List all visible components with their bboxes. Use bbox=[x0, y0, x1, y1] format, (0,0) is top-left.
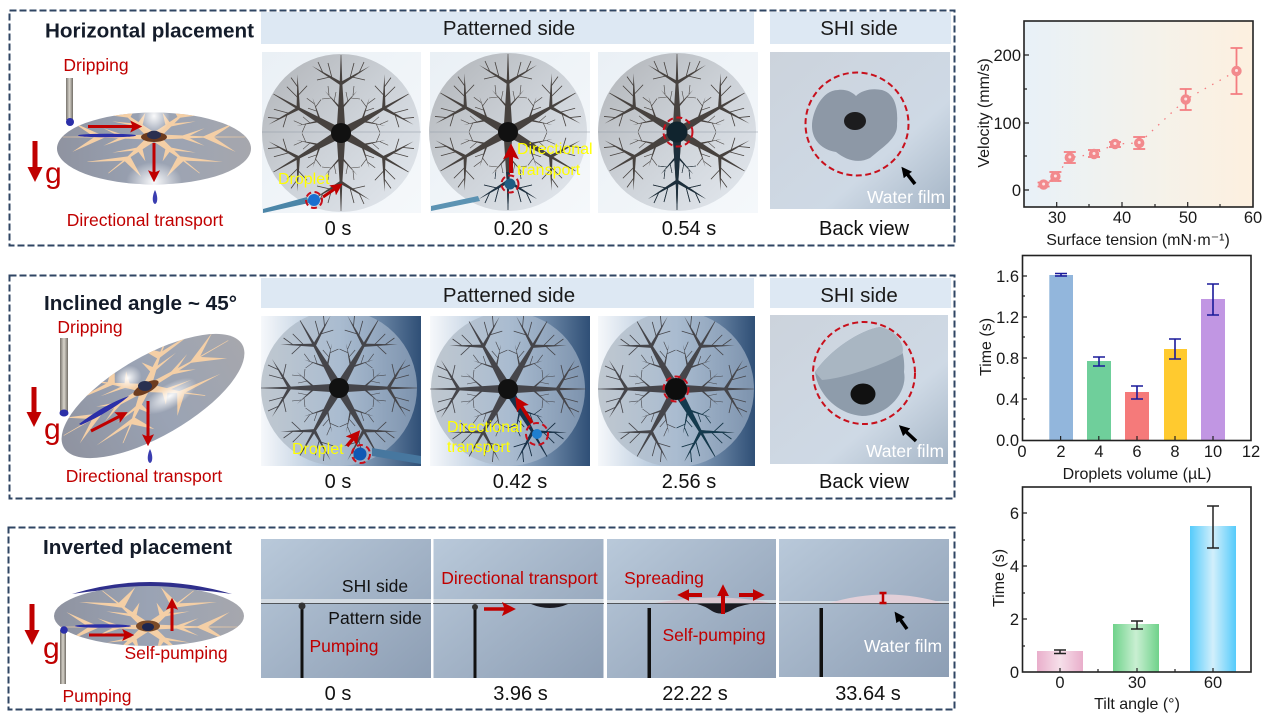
error bars bbox=[1054, 506, 1219, 654]
x axis labels bbox=[1017, 443, 1260, 461]
arrow: gravity bbox=[32, 141, 38, 176]
time labels: 0 s bbox=[325, 218, 351, 240]
panel: inverted placement bbox=[8, 528, 954, 710]
time labels: 0.42 s bbox=[493, 471, 547, 493]
chart: time vs droplet volume bbox=[978, 256, 1260, 483]
photo: 3.96 s bbox=[433, 539, 604, 678]
x axis labels: 12 bbox=[1242, 443, 1260, 461]
label: g: g bbox=[43, 632, 60, 665]
time labels: Back view bbox=[819, 218, 910, 240]
label: pumping: Pumping bbox=[62, 686, 132, 706]
photo: SHI side back view bbox=[770, 315, 948, 464]
label: self-pumping: Self-pumping bbox=[124, 643, 228, 663]
x axis labels: 50 bbox=[1179, 209, 1197, 227]
photo: droplet at 0.54 s bbox=[595, 52, 759, 213]
photo: droplet at 0.42 s: Directional bbox=[447, 419, 523, 436]
photo: droplet at 0.20 s: transport bbox=[517, 162, 581, 179]
time labels: 0.20 s bbox=[494, 218, 548, 240]
x axis labels: 0 bbox=[1017, 443, 1027, 461]
error bars and points bbox=[1038, 48, 1242, 190]
x axis labels: 0 bbox=[1055, 674, 1065, 692]
y axis labels: 1.2 bbox=[996, 309, 1019, 327]
photo: droplet at 0 s bbox=[259, 52, 423, 213]
photo: 3.96 s: Directional transport bbox=[441, 568, 598, 588]
x axis labels: 8 bbox=[1170, 443, 1180, 461]
photo: 33.64 s bbox=[779, 539, 949, 677]
label: dripping: Dripping bbox=[57, 317, 123, 337]
y axis labels: 4 bbox=[1010, 558, 1019, 576]
photo: 22.22 s: Self-pumping bbox=[662, 625, 766, 645]
photo: SHI side back view bbox=[770, 52, 950, 209]
header: patterned side bbox=[261, 278, 754, 308]
photo: 0 s: SHI side bbox=[342, 576, 408, 596]
header: SHI side bbox=[770, 12, 951, 44]
x axis labels: 10 bbox=[1204, 443, 1222, 461]
y axis labels: 0 bbox=[1012, 182, 1021, 200]
bars bbox=[1037, 526, 1236, 672]
time labels: 0 s bbox=[325, 683, 351, 705]
x axis labels: 40 bbox=[1113, 209, 1131, 227]
photo: SHI side back view: Water film bbox=[866, 441, 944, 461]
y axis title: Time (s) bbox=[978, 318, 995, 376]
photo: 33.64 s: Water film bbox=[864, 636, 942, 656]
x axis labels: 6 bbox=[1132, 443, 1142, 461]
header: patterned side bbox=[261, 12, 754, 44]
time labels: 0.54 s bbox=[662, 218, 716, 240]
x axis labels: 60 bbox=[1244, 209, 1262, 227]
time labels bbox=[325, 683, 901, 705]
heading: inclined angle: Inclined angle ~ 45° bbox=[44, 293, 237, 315]
photo: 0 s: Pattern side bbox=[328, 608, 422, 628]
time labels: Back view bbox=[819, 471, 910, 493]
photo: droplet at 0 s: Droplet bbox=[278, 171, 330, 188]
x axis labels: 60 bbox=[1204, 674, 1222, 692]
y axis labels bbox=[1010, 505, 1019, 682]
photo: 22.22 s: Spreading bbox=[624, 568, 704, 588]
water film thickness marker bbox=[880, 593, 886, 603]
bars bbox=[1049, 275, 1225, 440]
photo: 0 s bbox=[261, 539, 431, 678]
chart: time vs tilt angle bbox=[991, 487, 1251, 713]
y axis title: Velocity (mm/s) bbox=[976, 58, 993, 168]
y axis labels: 0 bbox=[1010, 664, 1019, 682]
x axis labels bbox=[1048, 209, 1262, 227]
label: g: g bbox=[44, 413, 61, 446]
time labels bbox=[325, 471, 910, 493]
y axis labels: 2 bbox=[1010, 611, 1019, 629]
header: SHI side: SHI side bbox=[820, 17, 898, 40]
photo: droplet at 0.20 s bbox=[426, 52, 593, 213]
error bars bbox=[1055, 274, 1219, 399]
x axis labels bbox=[1055, 674, 1222, 692]
heading: horizontal placement: Horizontal placement bbox=[45, 20, 254, 42]
icon: inverted disc diagram bbox=[54, 582, 244, 684]
dotted trend line bbox=[1044, 71, 1236, 185]
photo: droplet at 0.42 s bbox=[430, 316, 590, 466]
photo: droplet at 0 s: Droplet bbox=[292, 441, 344, 458]
y axis labels: 0.4 bbox=[996, 391, 1019, 409]
x axis title: Tilt angle (°) bbox=[1094, 696, 1180, 713]
y axis labels: 200 bbox=[993, 47, 1021, 65]
y axis labels: 100 bbox=[993, 115, 1021, 133]
x axis labels: 30 bbox=[1128, 674, 1146, 692]
label: directional transport: Directional transport bbox=[67, 210, 223, 230]
header: patterned side: Patterned side bbox=[443, 284, 575, 307]
x axis labels: 4 bbox=[1094, 443, 1104, 461]
y axis labels: 1.6 bbox=[996, 268, 1019, 286]
x axis labels: 2 bbox=[1056, 443, 1066, 461]
x axis title: Surface tension (mN·m⁻¹) bbox=[1046, 232, 1230, 249]
y axis labels bbox=[996, 268, 1019, 450]
panel: inclined placement bbox=[10, 276, 954, 498]
label: g: g bbox=[45, 157, 62, 190]
header: SHI side bbox=[770, 278, 951, 308]
header: patterned side: Patterned side bbox=[443, 17, 575, 40]
icon: inclined disc diagram bbox=[60, 334, 244, 463]
y axis labels: 0.0 bbox=[996, 432, 1019, 450]
y axis labels: 0.8 bbox=[996, 350, 1019, 368]
icon: horizontal disc diagram bbox=[57, 78, 251, 204]
arrow: gravity bbox=[32, 387, 36, 421]
time labels: 2.56 s bbox=[662, 471, 716, 493]
y axis labels: 6 bbox=[1010, 505, 1019, 523]
heading: inverted placement: Inverted placement bbox=[43, 537, 232, 559]
label: directional transport: Directional transport bbox=[66, 466, 222, 486]
y axis labels bbox=[993, 47, 1021, 200]
photo: droplet at 0.20 s: Directional bbox=[517, 141, 593, 158]
time labels: 22.22 s bbox=[662, 683, 728, 705]
panel: horizontal placement bbox=[10, 10, 954, 246]
arrow: gravity bbox=[30, 604, 34, 639]
photo: 22.22 s bbox=[607, 539, 776, 678]
chart: velocity vs surface tension bbox=[976, 21, 1262, 249]
x axis labels: 30 bbox=[1048, 209, 1066, 227]
header: SHI side: SHI side bbox=[820, 284, 898, 307]
photo: droplet at 2.56 s bbox=[598, 316, 755, 466]
photo: droplet at 0.42 s: transport bbox=[447, 439, 511, 456]
photo: droplet at 0 s bbox=[261, 316, 421, 466]
time labels: 3.96 s bbox=[493, 683, 548, 705]
time labels: 33.64 s bbox=[835, 683, 901, 705]
photo: 0 s: Pumping bbox=[309, 636, 379, 656]
time labels bbox=[325, 218, 910, 240]
label: dripping: Dripping bbox=[63, 55, 129, 75]
x axis title: Droplets volume (µL) bbox=[1063, 466, 1211, 483]
y axis title: Time (s) bbox=[991, 549, 1008, 607]
photo: SHI side back view: Water film bbox=[867, 187, 945, 207]
time labels: 0 s bbox=[325, 471, 351, 493]
